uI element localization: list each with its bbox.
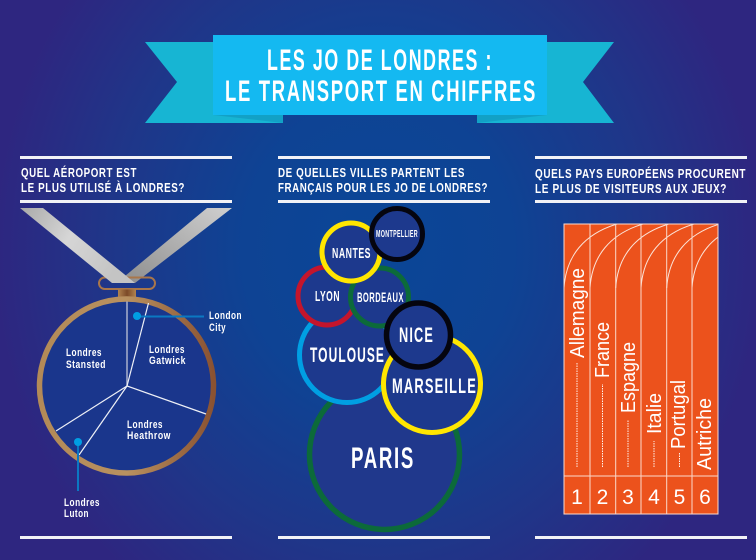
heading: cities: DE QUELLES VILLES PARTENT LES — [278, 165, 465, 180]
ribbon tail left — [145, 42, 283, 123]
medal neck — [118, 290, 136, 298]
lane numbers — [571, 486, 711, 509]
heading: cities: FRANÇAIS POUR LES JO DE LONDRES? — [278, 180, 488, 195]
label: Londres Heathrow: Heathrow — [127, 430, 171, 442]
medal ribbon — [20, 208, 232, 289]
circle: Montpellier — [372, 208, 422, 260]
circle: Paris — [310, 380, 460, 530]
country labels: France — [592, 322, 614, 378]
lane numbers: 6 — [699, 486, 711, 509]
city labels: BORDEAUX — [357, 290, 404, 305]
label: Londres Stansted — [66, 347, 106, 371]
callout: London City: City — [209, 322, 226, 334]
panel: countries — [535, 156, 747, 514]
heading: countries — [535, 156, 747, 203]
lane numbers: 2 — [597, 486, 608, 509]
city labels — [310, 229, 477, 475]
callout: Londres Luton — [64, 438, 100, 520]
label: Londres Heathrow: Londres — [127, 419, 163, 431]
circle: Nice — [386, 303, 450, 367]
label: Londres Gatwick: Londres — [149, 344, 185, 356]
heading: cities — [278, 156, 490, 203]
label: Londres Stansted: Stansted — [66, 359, 106, 371]
city labels: MONTPELLIER — [376, 229, 418, 240]
lane numbers: 3 — [622, 486, 634, 509]
callout: London City: London — [209, 310, 242, 322]
title text: LE TRANSPORT EN CHIFFRES — [225, 75, 537, 108]
circle: Bordeaux — [350, 268, 408, 326]
running track chart — [564, 224, 718, 514]
city labels: TOULOUSE — [310, 344, 385, 367]
city labels: PARIS — [351, 442, 415, 475]
lane numbers: 5 — [674, 486, 685, 509]
country labels: Italie — [644, 393, 666, 434]
city labels: NICE — [399, 324, 434, 347]
title text — [225, 44, 537, 108]
circle: Lyon — [298, 267, 356, 325]
label: Londres Stansted: Londres — [66, 347, 102, 359]
lane numbers: 1 — [571, 486, 583, 509]
ribbon main panel — [213, 35, 547, 115]
callout: Londres Luton: Luton — [64, 508, 89, 520]
country labels: Allemagne — [567, 268, 589, 358]
heading: airports — [20, 156, 232, 203]
panel: airports — [20, 156, 242, 520]
circle: Marseille — [384, 336, 480, 432]
callout: London City — [133, 310, 242, 334]
city labels: NANTES — [332, 245, 371, 262]
country labels: Portugal — [668, 380, 690, 449]
dotted leaders — [577, 362, 680, 467]
title banner — [145, 35, 614, 123]
heading: airports: QUEL AÉROPORT EST — [21, 165, 137, 180]
country labels: Autriche — [694, 398, 716, 470]
country labels — [567, 268, 716, 470]
ribbon tail right — [477, 42, 614, 123]
panel: cities — [278, 156, 490, 530]
callout: Londres Luton: Londres — [64, 497, 100, 509]
label: Londres Heathrow — [127, 419, 171, 442]
lane numbers: 4 — [648, 486, 660, 509]
country labels: Espagne — [618, 342, 640, 413]
city labels: LYON — [315, 288, 340, 305]
city labels: MARSEILLE — [392, 375, 477, 398]
heading: airports: LE PLUS UTILISÉ À LONDRES? — [21, 180, 185, 195]
title text: LES JO DE LONDRES : — [267, 44, 493, 77]
circle: Toulouse — [300, 308, 394, 402]
label: Londres Gatwick: Gatwick — [149, 355, 186, 367]
circle: Nantes — [322, 223, 380, 281]
medal pie chart — [40, 299, 214, 473]
label: Londres Gatwick — [149, 344, 186, 367]
